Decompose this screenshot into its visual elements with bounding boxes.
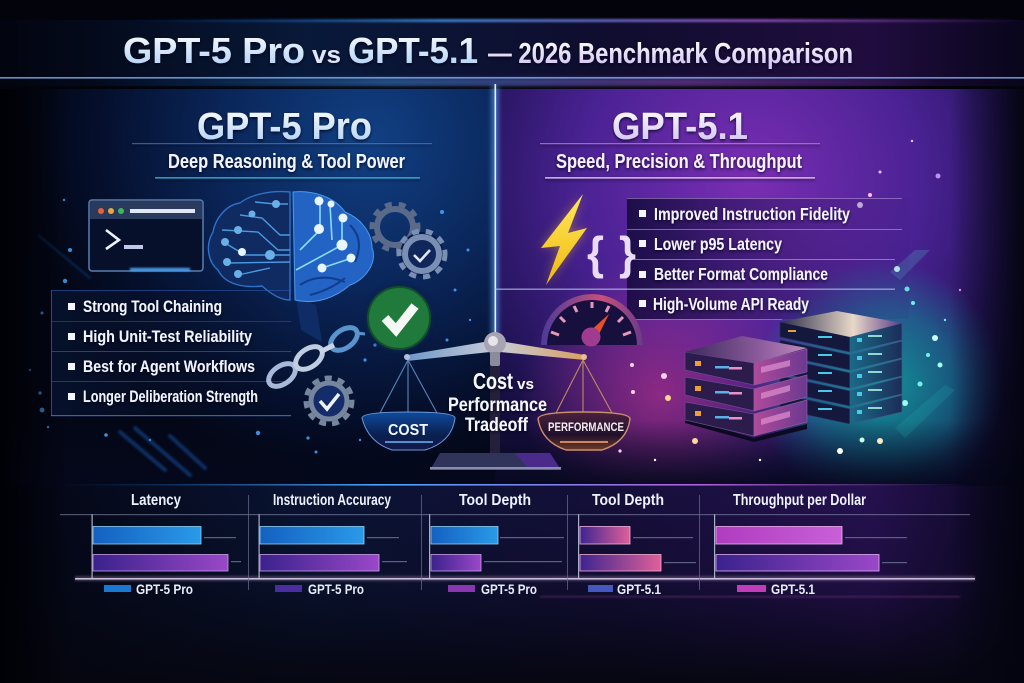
legend <box>104 581 815 597</box>
title: — 2026 Benchmark Comparison <box>488 38 853 70</box>
list text: Best for Agent Workflows <box>83 357 255 376</box>
icon: terminal window <box>89 200 203 271</box>
scale label: Cost <box>473 368 513 394</box>
list text: Improved Instruction Fidelity <box>654 204 850 224</box>
bar chart: Latency <box>92 492 241 579</box>
title <box>123 30 853 71</box>
panel: GPT-5.1 background <box>495 88 1024 488</box>
legend: GPT-5.1 <box>617 581 661 597</box>
icon: speed gauge <box>541 294 643 346</box>
pan: performance <box>538 412 630 450</box>
horizontal glow line <box>495 288 895 290</box>
icon: gears <box>372 204 445 277</box>
legend: GPT-5 Pro <box>308 581 364 597</box>
performance chains <box>556 360 612 413</box>
bar chart: Tool Depth (second): Tool Depth <box>592 492 664 509</box>
section top line <box>60 484 970 486</box>
diagonal light streaks <box>38 235 205 475</box>
scale label: vs <box>517 376 534 393</box>
bar chart: Latency: Latency <box>131 492 181 509</box>
icon: green check badge <box>365 284 433 352</box>
list panel: GPT-5 Pro strengths <box>51 290 291 416</box>
bar chart: Throughput per Dollar: Throughput per Dollar <box>733 492 866 509</box>
title: GPT-5.1 <box>348 30 478 71</box>
scale beam <box>407 341 585 361</box>
list panel: GPT-5.1 strengths <box>627 198 909 320</box>
icon: left server stack <box>685 336 807 442</box>
heading: GPT-5.1 <box>540 106 820 179</box>
lower section background <box>0 486 1024 683</box>
title: vs <box>312 42 341 69</box>
center divider line <box>491 84 499 342</box>
pan: cost: COST <box>388 422 428 439</box>
header band <box>0 0 1024 89</box>
legend: GPT-5 Pro <box>481 581 537 597</box>
legend: GPT-5.1 <box>771 581 815 597</box>
bar chart: Tool Depth (first) <box>429 492 564 579</box>
heading: GPT-5 Pro: Deep Reasoning & Tool Power <box>168 151 405 173</box>
scale label <box>448 368 547 436</box>
icon: lightning bolt <box>541 194 587 285</box>
bar chart: Throughput per Dollar <box>714 492 907 579</box>
icon: gear with check <box>306 378 352 424</box>
list text: Better Format Compliance <box>654 264 828 284</box>
list text: Strong Tool Chaining <box>83 297 222 316</box>
scale label: Tradeoff <box>465 415 529 436</box>
bar chart: Instruction Accuracy <box>258 492 407 579</box>
list text <box>653 204 850 314</box>
bar chart: Instruction Accuracy: Instruction Accuracy <box>273 492 391 509</box>
icon: chain links <box>265 323 365 391</box>
background sparkles: right <box>618 140 961 461</box>
lower fade <box>0 420 1024 488</box>
icon: code braces <box>587 227 636 279</box>
list text: Longer Deliberation Strength <box>83 387 258 406</box>
heading: GPT-5 Pro: GPT-5 Pro <box>197 106 372 148</box>
icon: circuit brain <box>208 192 373 342</box>
bar chart: Tool Depth (second) <box>578 492 696 579</box>
list text: High-Volume API Ready <box>653 294 809 314</box>
heading: GPT-5 Pro <box>132 106 432 179</box>
chart axis lines <box>60 495 975 598</box>
heading: GPT-5.1: Speed, Precision & Throughput <box>556 151 802 173</box>
cost chains <box>380 360 437 413</box>
scale: balance <box>362 332 630 470</box>
list text <box>83 297 258 406</box>
scale label: Performance <box>448 395 547 416</box>
icon: code braces: { <box>587 227 604 279</box>
pan: cost <box>362 412 455 450</box>
legend: GPT-5 Pro <box>136 581 193 597</box>
pan: performance: PERFORMANCE <box>548 422 624 434</box>
list text: High Unit-Test Reliability <box>83 327 252 346</box>
scale column <box>490 365 500 455</box>
heading: GPT-5.1: GPT-5.1 <box>612 106 748 148</box>
title: GPT-5 Pro <box>123 30 305 71</box>
list text: Lower p95 Latency <box>654 234 782 254</box>
icon: code braces: } <box>619 227 636 279</box>
icon: right server stack <box>780 311 902 424</box>
bar chart: Tool Depth (first): Tool Depth <box>459 492 531 509</box>
panel: GPT-5 Pro background <box>0 88 495 488</box>
scale base <box>430 453 561 470</box>
background sparkles: left <box>29 199 471 454</box>
scale pivot <box>484 332 506 366</box>
